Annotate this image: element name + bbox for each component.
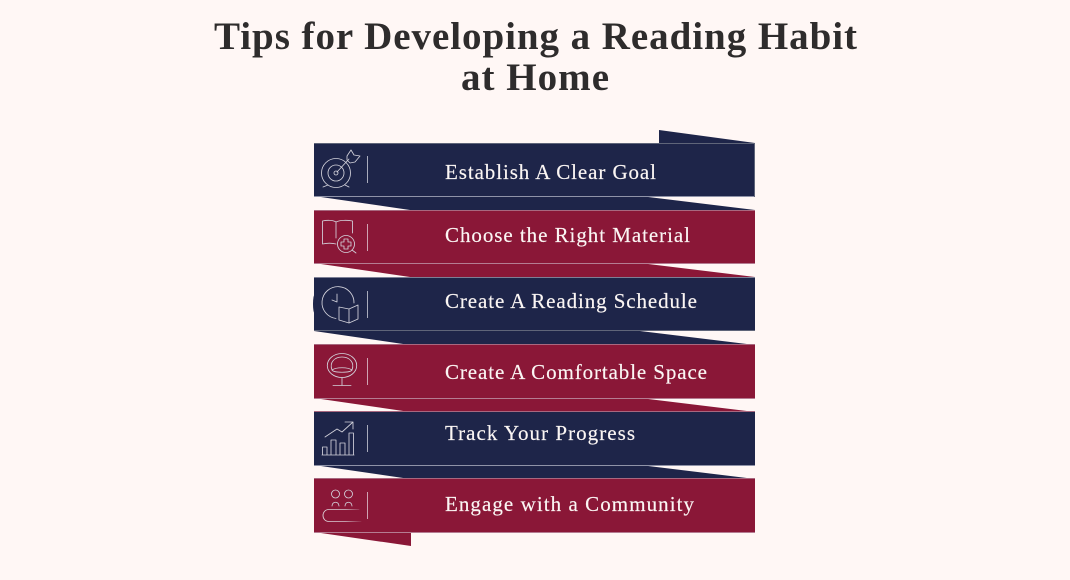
icon: people with book (323, 490, 361, 522)
divider (366, 358, 368, 385)
label: Establish A Clear Goal (445, 160, 656, 184)
bar (314, 277, 755, 331)
step 5: track your progress (314, 412, 755, 466)
label: Track Your Progress (445, 421, 635, 445)
ribbon fold: crimson to navy 1 (314, 263, 755, 277)
title: Tips for Developing a Reading Habit (214, 15, 857, 58)
divider (366, 156, 368, 183)
bar (314, 479, 755, 533)
ribbon fold: navy to crimson 3 (314, 465, 755, 479)
bar (314, 345, 755, 399)
ribbon fold: top right (659, 130, 755, 143)
bar (314, 143, 755, 197)
icon: rising bar chart (322, 422, 354, 455)
step 1: establish a clear goal (314, 143, 755, 197)
bar (314, 412, 755, 466)
label: Create A Comfortable Space (445, 360, 707, 384)
icon: egg chair (327, 354, 357, 386)
ribbon fold: navy to crimson 2 (314, 331, 755, 345)
bar (314, 210, 755, 264)
icon: open book with magnifier (322, 220, 356, 253)
step 4: create a comfortable space (314, 344, 755, 399)
step 2: choose the right material (314, 210, 755, 264)
step 3: create a reading schedule (313, 277, 755, 331)
title (214, 15, 857, 99)
divider (366, 291, 368, 318)
ribbon fold: navy to crimson 1 (314, 196, 755, 210)
step 6: engage with a community (314, 478, 755, 533)
divider (366, 224, 368, 251)
icon: clock with book (322, 287, 358, 323)
ribbon list (313, 130, 755, 546)
label: Create A Reading Schedule (445, 289, 697, 313)
icon: target with arrow (322, 150, 360, 188)
ribbon fold: bottom left (314, 532, 411, 546)
ribbon fold: crimson to navy 2 (314, 398, 755, 412)
divider (366, 425, 368, 452)
label: Choose the Right Material (445, 223, 690, 247)
title: at Home (461, 56, 609, 99)
label: Engage with a Community (445, 492, 694, 516)
divider (366, 492, 368, 519)
